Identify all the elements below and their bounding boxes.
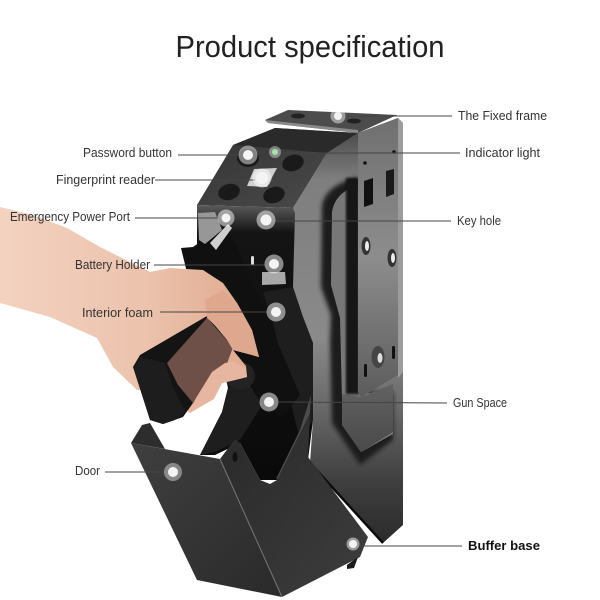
- label: Indicator light: [269, 145, 540, 160]
- fingers over grip: [188, 362, 247, 413]
- label: The Fixed frame: The Fixed frame: [458, 108, 547, 123]
- pistol grip: [133, 316, 233, 424]
- label: Emergency Power Port: [10, 209, 234, 226]
- top fixed frame flange: [265, 110, 397, 133]
- open cavity and interior foam: [197, 205, 313, 480]
- keypad top panel: [197, 128, 358, 208]
- pistol slide: [181, 212, 300, 418]
- label: Battery Holder: Battery Holder: [75, 257, 151, 272]
- label: Gun Space: Gun Space: [453, 395, 507, 410]
- label: Interior foam: Interior foam: [82, 305, 153, 320]
- hand and arm: [0, 207, 259, 413]
- label: Indicator light: Indicator light: [465, 145, 540, 160]
- product: gun safe: [131, 110, 403, 597]
- fingerprint sensor: [247, 168, 277, 187]
- label: Buffer base: [346, 538, 540, 553]
- door: [131, 413, 368, 597]
- label: Fingerprint reader: [56, 168, 272, 188]
- label: Fingerprint reader: Fingerprint reader: [56, 172, 156, 187]
- label: Interior foam: [82, 302, 286, 322]
- body side panel: [293, 118, 403, 543]
- label: Battery Holder: [75, 254, 284, 274]
- label: Key hole: [256, 210, 501, 230]
- label: The Fixed frame: [330, 108, 547, 124]
- back mounting plate: [358, 118, 403, 397]
- label: Password button: Password button: [83, 145, 172, 160]
- label: Password button: [83, 145, 258, 164]
- label: Door: Door: [75, 463, 101, 478]
- label: Buffer base: Buffer base: [468, 538, 540, 553]
- title: Product specification: [176, 29, 444, 64]
- label: Gun Space: [260, 392, 507, 412]
- label: Door: [75, 463, 182, 481]
- keypad buttons: [216, 149, 306, 206]
- label: Emergency Power Port: Emergency Power Port: [10, 209, 130, 224]
- hand holding pistol grip: [0, 207, 259, 424]
- label: Key hole: Key hole: [457, 213, 501, 228]
